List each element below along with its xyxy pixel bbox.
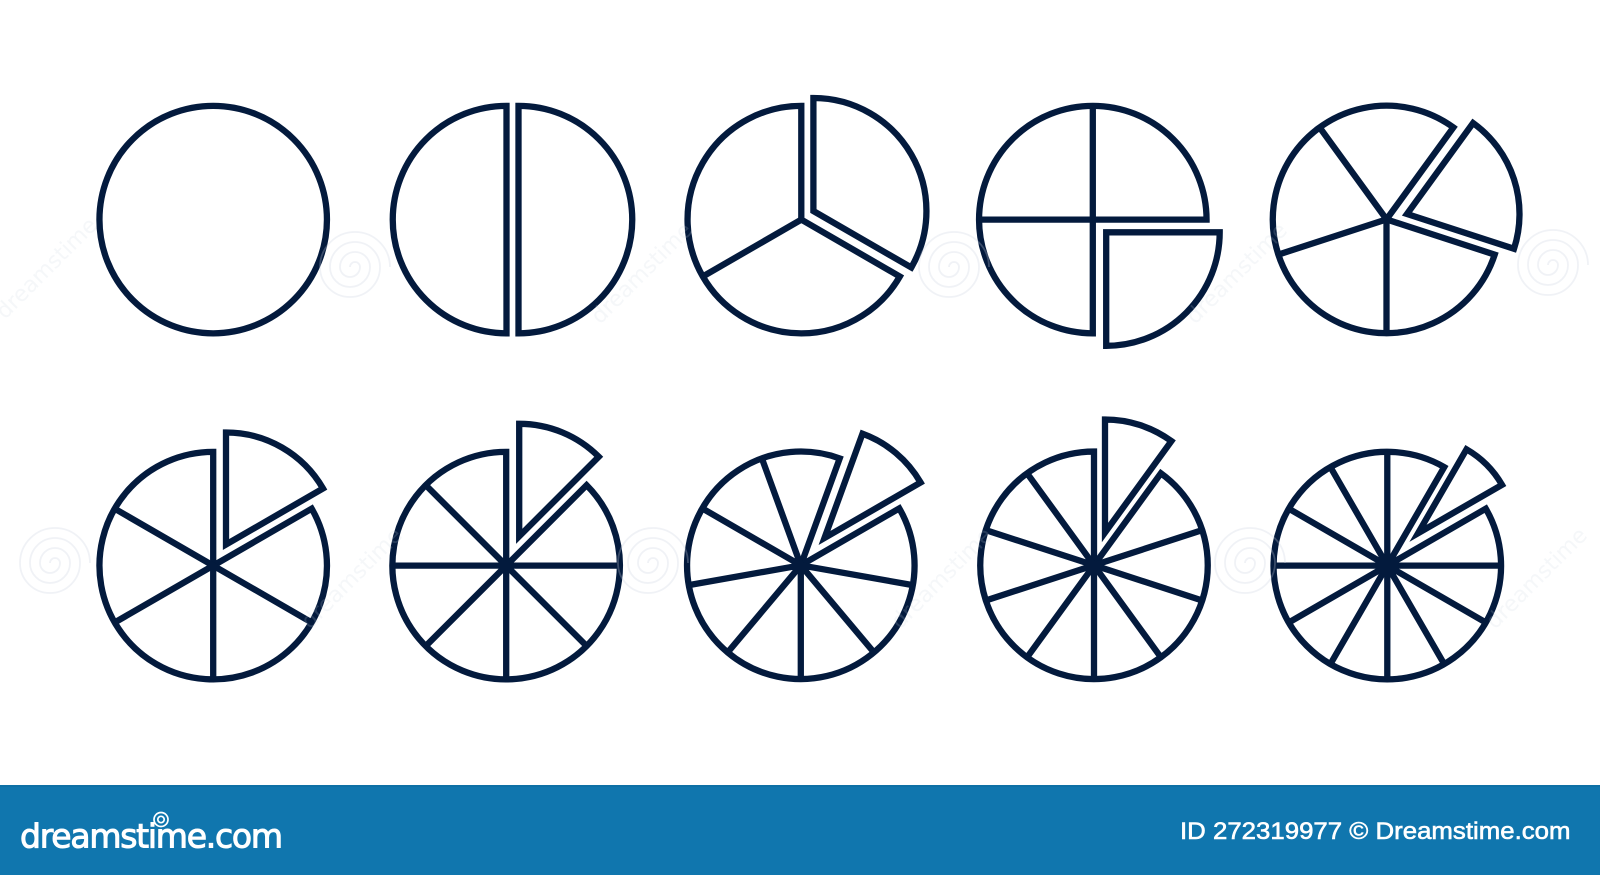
image id credit: ID 272319977 © Dreamstime.com [1180,818,1570,845]
remaining slices [99,452,327,679]
remaining slices [392,452,620,679]
pie: ten slices with one pulled out [980,420,1208,679]
dreamstime logo text: dreamstime.com [20,816,283,856]
pie: four slices with one pulled out [979,106,1220,346]
pulled-out slice [824,434,921,538]
remaining slices [687,452,915,679]
pie: eight slices with one pulled out [392,424,620,679]
watermark spirals [20,230,1588,593]
spoke lines [115,509,312,679]
pulled-out slice [813,98,926,267]
spoke lines [1274,452,1501,679]
remaining slices [1274,452,1501,679]
pie: six slices with one pulled out [99,432,327,679]
watermark text: dreamstime [887,523,998,634]
remaining slices [979,106,1207,333]
remaining slices [1273,106,1495,333]
watermark text: dreamstime [587,218,698,329]
pulled-out slice [1106,232,1220,346]
pulled-out slice [1105,420,1171,532]
watermark text [0,213,1593,634]
pulled-out slice [519,424,599,536]
icon: logo spiral [154,812,168,826]
spoke lines [689,458,913,679]
pie: three slices with one pulled out [688,98,926,333]
spoke lines [703,220,801,276]
watermark text: dreamstime [1182,218,1293,329]
watermark text: dreamstime [1482,523,1593,634]
spoke lines [979,106,1093,220]
left half [393,106,506,333]
remaining slices [980,452,1208,679]
pulled-out slice [1407,123,1520,249]
spoke lines [986,473,1202,679]
pie: nine slices with one pulled out [687,434,921,679]
pie: whole circle [99,106,327,333]
right half [518,106,632,333]
remaining slices [688,106,900,333]
pulled-out slice [1418,449,1502,533]
watermark text: dreamstime [297,523,408,634]
pie: two halves [393,106,632,333]
footer banner [0,785,1600,875]
pie: five slices with one pulled out [1273,106,1520,333]
spoke lines [1278,127,1386,333]
spoke lines [392,485,620,679]
pulled-out slice [226,432,323,544]
pie: twelve slices with one pulled out [1274,449,1502,679]
